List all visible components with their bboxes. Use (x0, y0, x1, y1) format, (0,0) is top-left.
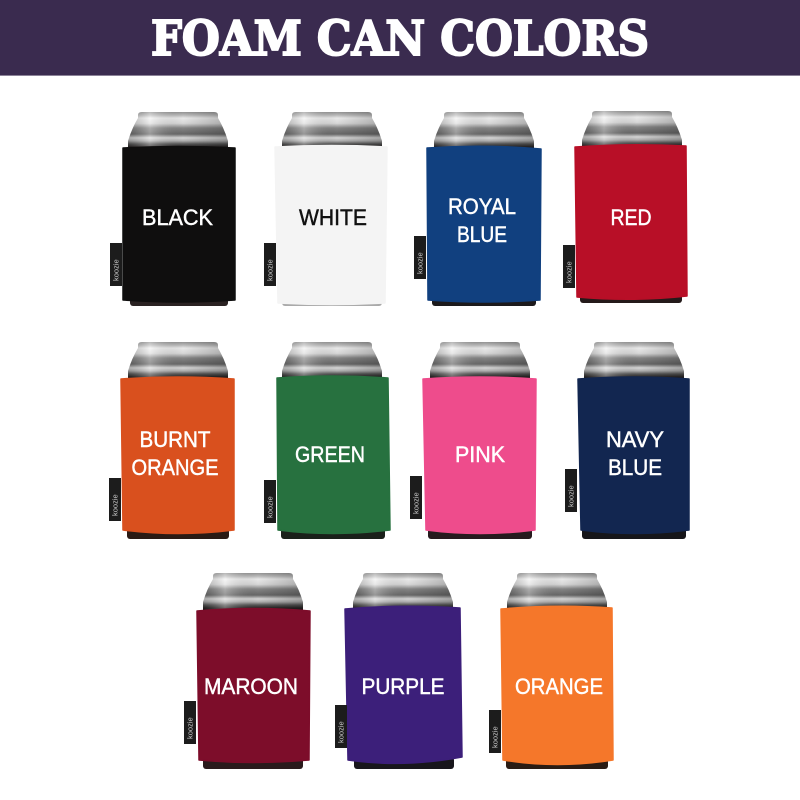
title banner (0, 0, 800, 76)
can: navy blue: NAVY (606, 427, 664, 452)
can: green: GREEN (295, 442, 365, 467)
can: black: BLACK (142, 205, 213, 230)
title: FOAM CAN COLORS (151, 11, 649, 67)
can: green (264, 342, 390, 539)
can: pink (410, 342, 536, 539)
can: purple (335, 573, 462, 769)
can: red (563, 111, 687, 303)
can: navy blue: BLUE (608, 455, 662, 480)
can: black (110, 112, 235, 306)
can: royal blue: ROYAL (448, 194, 516, 219)
can: royal blue (414, 112, 541, 306)
can: orange: ORANGE (515, 674, 603, 699)
can: pink: PINK (455, 442, 505, 467)
can: burnt orange: ORANGE (132, 455, 218, 480)
can: maroon: MAROON (204, 674, 298, 699)
can: white: WHITE (299, 205, 367, 230)
can: purple: PURPLE (362, 674, 444, 699)
can: burnt orange: BURNT (140, 427, 210, 452)
can: royal blue: BLUE (457, 222, 507, 247)
can: orange (489, 573, 613, 769)
can: red: RED (610, 205, 652, 230)
can: maroon (184, 573, 310, 769)
can: burnt orange (109, 342, 234, 539)
can: navy blue (565, 342, 689, 539)
can: white (264, 112, 387, 306)
